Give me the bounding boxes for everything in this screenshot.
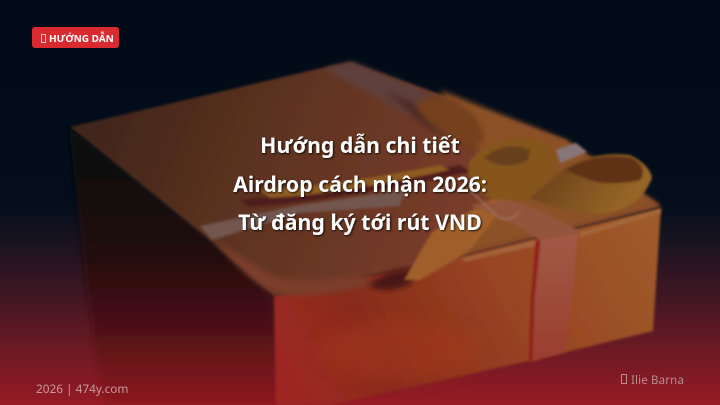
ribbon on lid, back xyxy=(325,62,440,116)
bow loop xyxy=(530,154,652,214)
badge: category: HƯỚNG DẪN xyxy=(49,31,114,45)
footer: year and site: 2026 | 474y.com xyxy=(36,381,128,397)
ribbon on lid, front white band xyxy=(200,190,405,240)
bow upper petal xyxy=(415,96,485,150)
title: Hướng dẫn chi tiết xyxy=(260,131,460,160)
title: Từ đăng ký tới rút VND xyxy=(238,208,482,237)
white ribbon behind bow xyxy=(556,143,587,163)
bow tail xyxy=(404,185,520,280)
lid lower lip highlight xyxy=(462,240,535,262)
dark red ribbon strand xyxy=(240,165,470,207)
box right front face xyxy=(274,208,661,405)
bow knot xyxy=(469,137,558,201)
strand thin white xyxy=(470,190,520,219)
soft glow in lower right face xyxy=(320,320,480,380)
shadow below bow tail xyxy=(368,269,415,290)
title: Airdrop cách nhận 2026: xyxy=(233,170,487,199)
badge: category xyxy=(32,27,119,48)
title xyxy=(233,131,488,238)
box top face xyxy=(70,62,661,296)
vertical ribbon on front xyxy=(530,232,578,362)
credit: photographer: Ilie Barna xyxy=(631,373,684,388)
top face warm right area xyxy=(410,90,661,282)
box left shaded face xyxy=(69,128,278,405)
lid front lip highlight xyxy=(215,240,378,296)
ribbon strands over lid xyxy=(470,200,580,240)
